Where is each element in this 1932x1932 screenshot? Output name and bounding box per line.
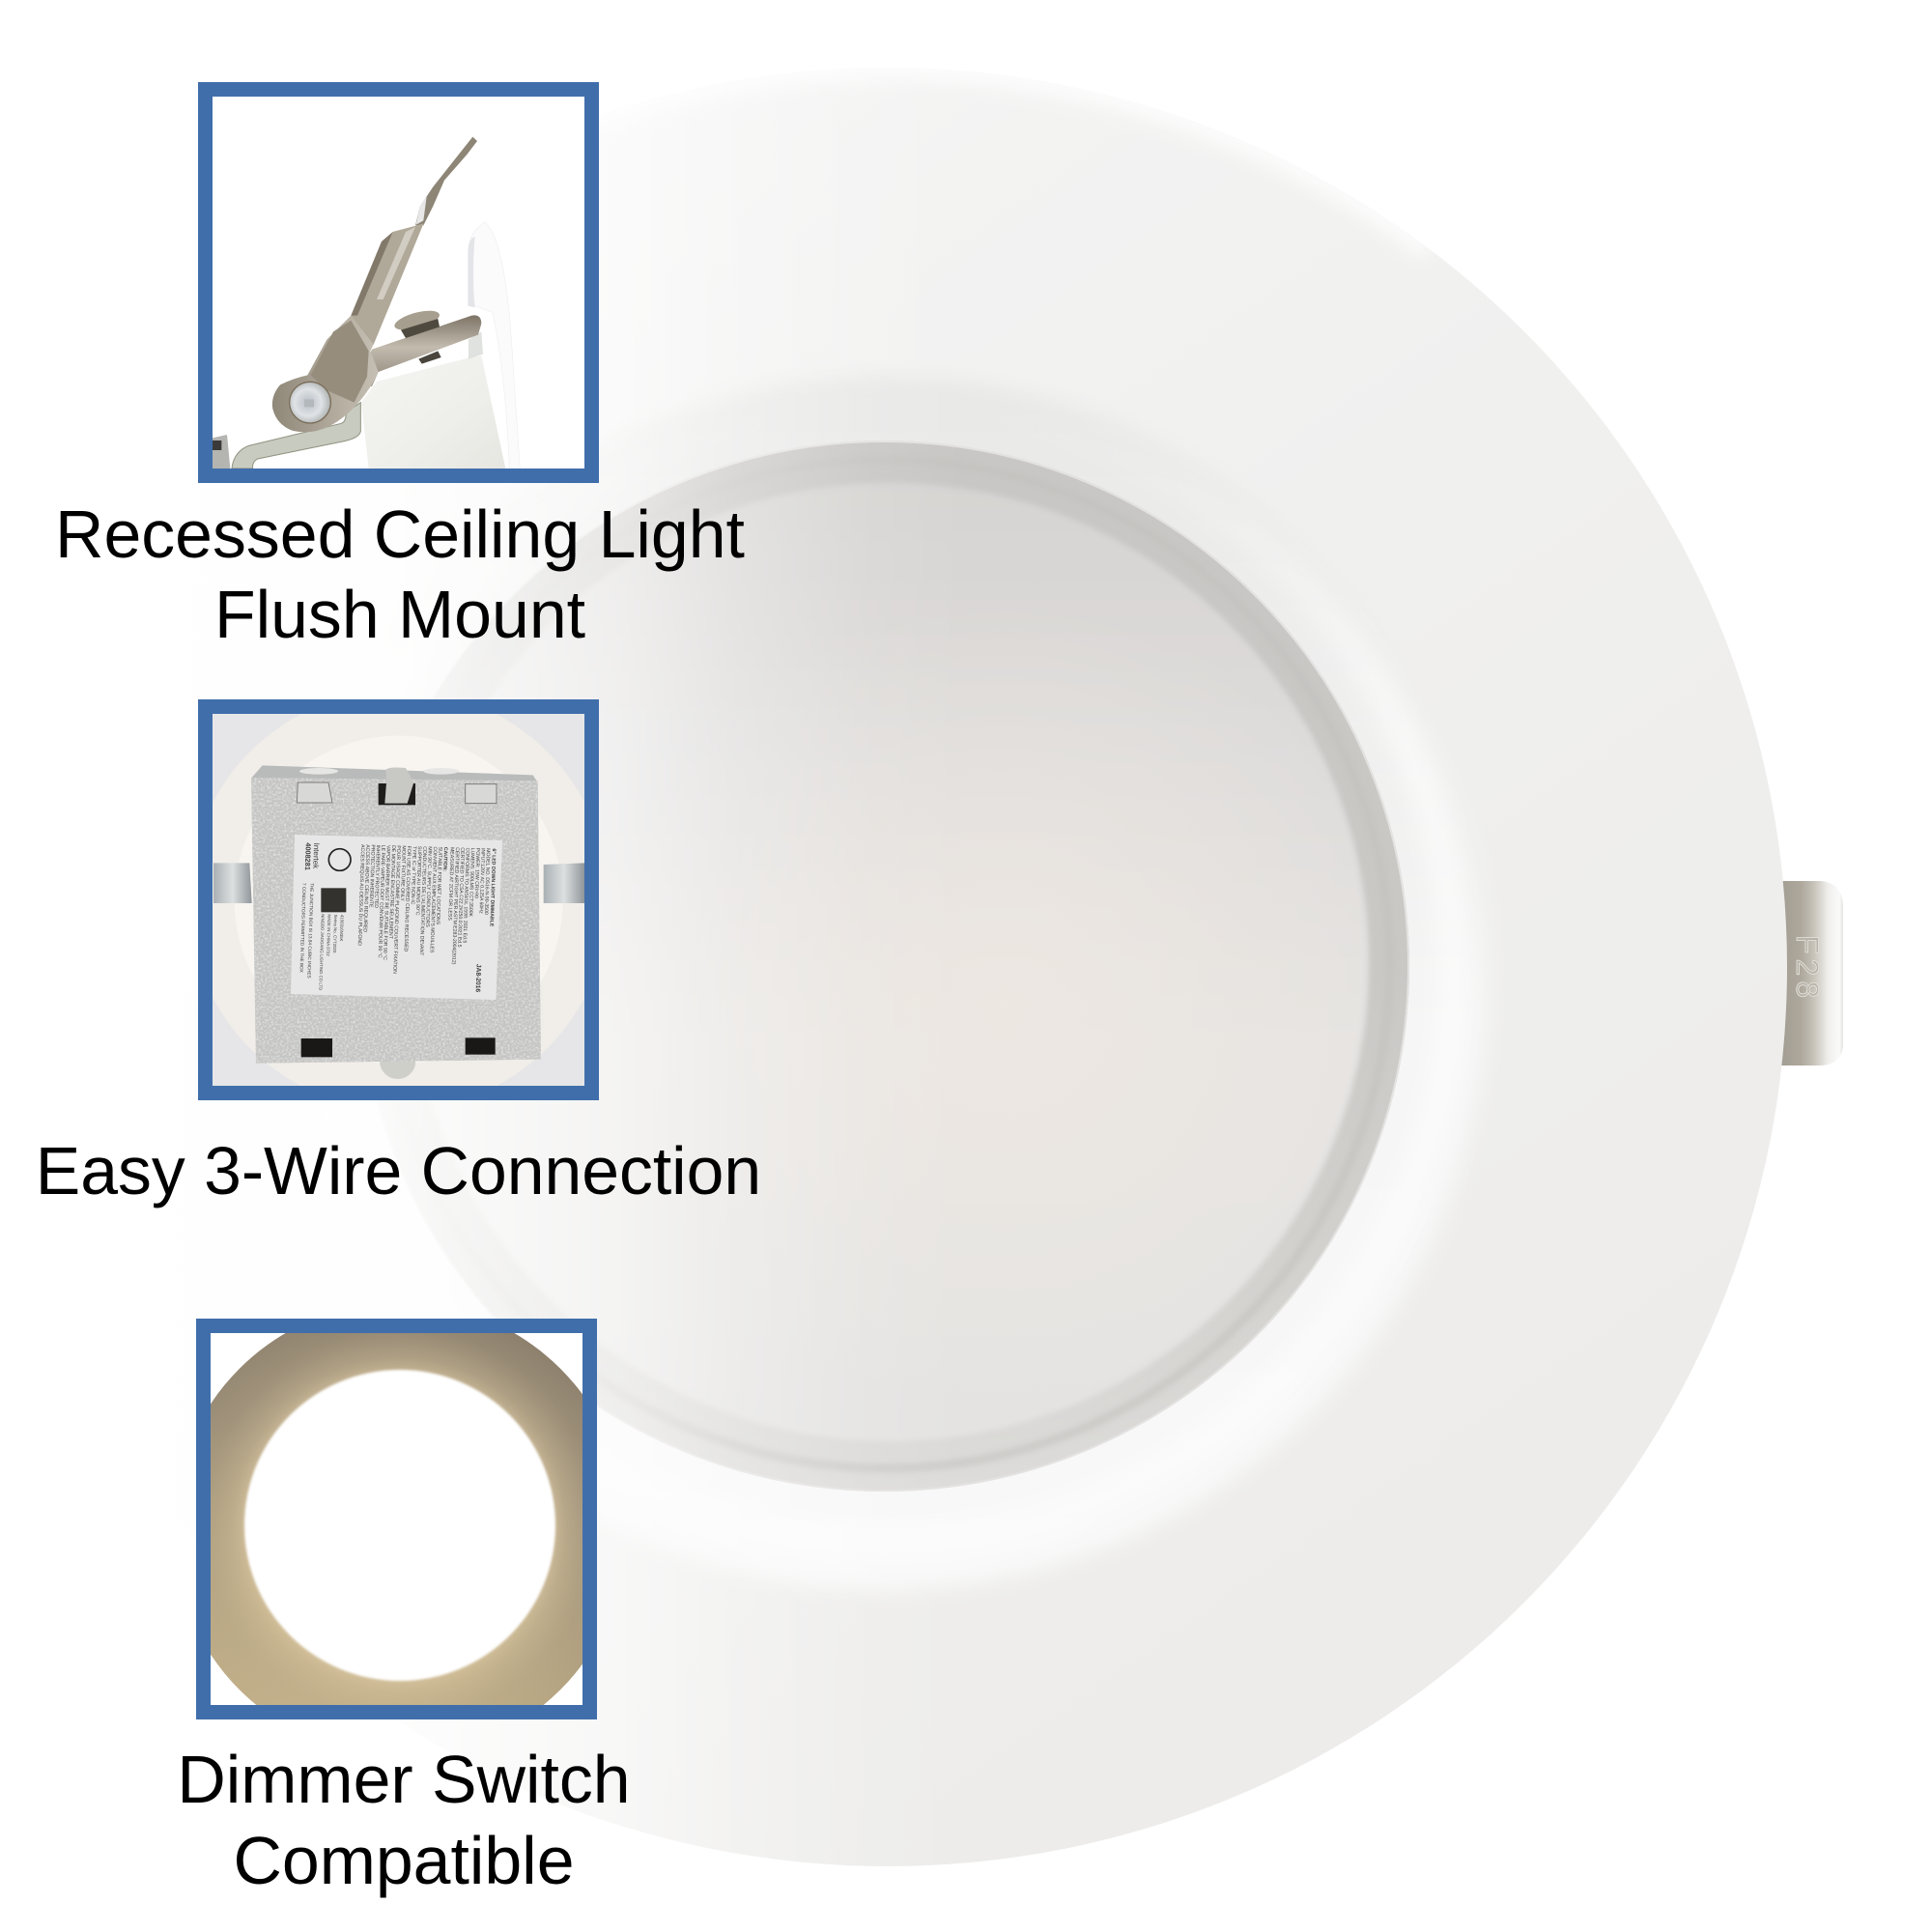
label text: 7 CONDUCTORS PERMITTED IN THE BOX — [299, 883, 306, 974]
housing — [361, 355, 505, 469]
white fade over left side — [0, 0, 966, 1932]
caption: recessed ceiling light flush mount: Recessed Ceiling Light — [55, 497, 745, 572]
label text: SUPPORTER AU MOINS 90°C — [414, 846, 422, 916]
ring rim edge — [359, 441, 1408, 1491]
caption: easy 3-wire connection: Easy 3-Wire Connection — [36, 1133, 761, 1208]
label text: INHERENTLY PROTECTED — [373, 844, 381, 908]
caption: dimmer switch compatible — [177, 1742, 631, 1898]
label text: JA8-2016 — [474, 964, 482, 993]
blue frame — [203, 1325, 589, 1712]
label text: INPUT:120V AC 0.125A 60Hz — [478, 848, 486, 914]
diffuser lens — [411, 483, 1369, 1441]
label text: THE JUNCTION BOX IS 13.84 CUBIC INCHES — [306, 883, 314, 979]
label text: LE PARE-VAPEUR DOIT CONVENIR POUR 90 °C — [377, 845, 385, 958]
label text — [298, 842, 497, 996]
label text: NINGBO JIAOGANG LIGHTING CO LTD — [318, 914, 326, 990]
label text: MADE IN CHINA 0722 — [326, 914, 331, 956]
blue frame — [205, 89, 591, 475]
label text: DE MONTAGE ENCASTRE SEULEMENT — [387, 845, 396, 940]
label text: POUR USAGE COMME PLAFOND COUVERT FIXATION — [391, 845, 401, 974]
product photo: recessed downlight seen from the front — [226, 82, 1843, 1866]
box top face — [251, 765, 538, 782]
side bracket left — [213, 863, 252, 903]
bolt head — [290, 382, 330, 423]
label text: MIN 90°C. SUPPLY CONDUCTORS — [424, 846, 433, 927]
adjustment screw — [392, 307, 441, 364]
label text: CONVIENT AUX EMPLACEMENTS MOUILLES — [429, 846, 438, 953]
panel: dimmer — [173, 1302, 627, 1756]
ring inner groove — [382, 460, 1390, 1468]
ETL mark — [328, 849, 351, 870]
horizontal arm — [357, 315, 481, 386]
label text: TYPE IC or TYPE NON-IC — [410, 846, 417, 905]
blue frame — [205, 707, 591, 1094]
label text: POWER: 15W CRI>90 — [473, 848, 480, 898]
caption: dimmer switch compatible: Dimmer Switch — [177, 1742, 631, 1817]
raised inner flange band — [684, 384, 1482, 1586]
label text: CERTIFIED TO CSA C22.2#250.0:2021 Ed.5 — [456, 847, 465, 948]
photo: spring clip on fixture edge — [213, 137, 520, 469]
mounting spring tab — [1768, 881, 1843, 1065]
trim flange — [469, 222, 520, 469]
knockout tabs — [297, 767, 497, 805]
label text: MODEL NO. D516-N-90-3500 — [483, 848, 491, 915]
energy mark — [321, 888, 346, 912]
certification label — [291, 835, 502, 1000]
label text: MOUNT FIXTURE ONLY — [399, 845, 407, 901]
label text: FOR USE AS COVERED CEILING RECESSED — [403, 846, 412, 952]
upper spring blade — [415, 137, 477, 225]
label text: Series No. CYT2020 — [332, 915, 338, 953]
mounting spring tab: F28 — [1790, 935, 1825, 1003]
spring body — [272, 224, 423, 432]
label text: LUMENS: 900LMS CCT:3500K — [468, 848, 475, 918]
zinc wire bracket — [232, 403, 360, 469]
label text: PROTECTION INHERENTE — [368, 844, 376, 908]
label text: CONFORMS TO ANSI/UL 1598: 2021 Ed.5 — [462, 847, 470, 943]
left clip stub — [213, 435, 230, 469]
pry tab at bottom — [380, 1061, 415, 1079]
label text: 4100316N35K — [339, 915, 345, 942]
label text: SUITABLE FOR WET LOCATIONS — [435, 847, 442, 925]
caption: dimmer switch compatible: Compatible — [233, 1823, 575, 1898]
bottom slots — [301, 1037, 496, 1057]
side bracket right — [544, 863, 584, 903]
label text: ACCES REQUIS AU-DESSUS DU PLAFOND — [356, 844, 365, 946]
label text: CONDUCTEURS DE L'ALIMENTATION DEVANT — [418, 846, 427, 956]
panel: flush mount bracket — [205, 89, 591, 475]
label text: MEASURED AT 2CFM OR LESS — [446, 847, 455, 921]
label text: Intertek — [311, 842, 321, 868]
box front face — [251, 778, 541, 1064]
label text: CERTIFIED AIRTIGHT PER ASTM E283-2004(2012) — [450, 847, 460, 965]
photo: back of fixture with junction box — [213, 714, 584, 1086]
photo: fixture lit at warm dim level — [173, 1302, 627, 1756]
soft top rim of flange — [290, 68, 1430, 296]
trim ring — [358, 440, 1409, 1492]
label text: CAUTION: — [441, 847, 448, 871]
label text: ACCESS ABOVE CEILING REQUIRED — [362, 844, 370, 932]
caption: recessed ceiling light flush mount — [55, 497, 745, 652]
label text: 4008281 — [303, 842, 313, 870]
panel: junction box — [188, 690, 609, 1110]
label text: VAPOR BARRIER MUST BE SUITABLE FOR 90 °C — [382, 845, 391, 960]
label text: 6" LED DOWN LIGHT DIMMABLE — [488, 848, 497, 927]
caption: recessed ceiling light flush mount: Flush Mount — [214, 577, 585, 652]
